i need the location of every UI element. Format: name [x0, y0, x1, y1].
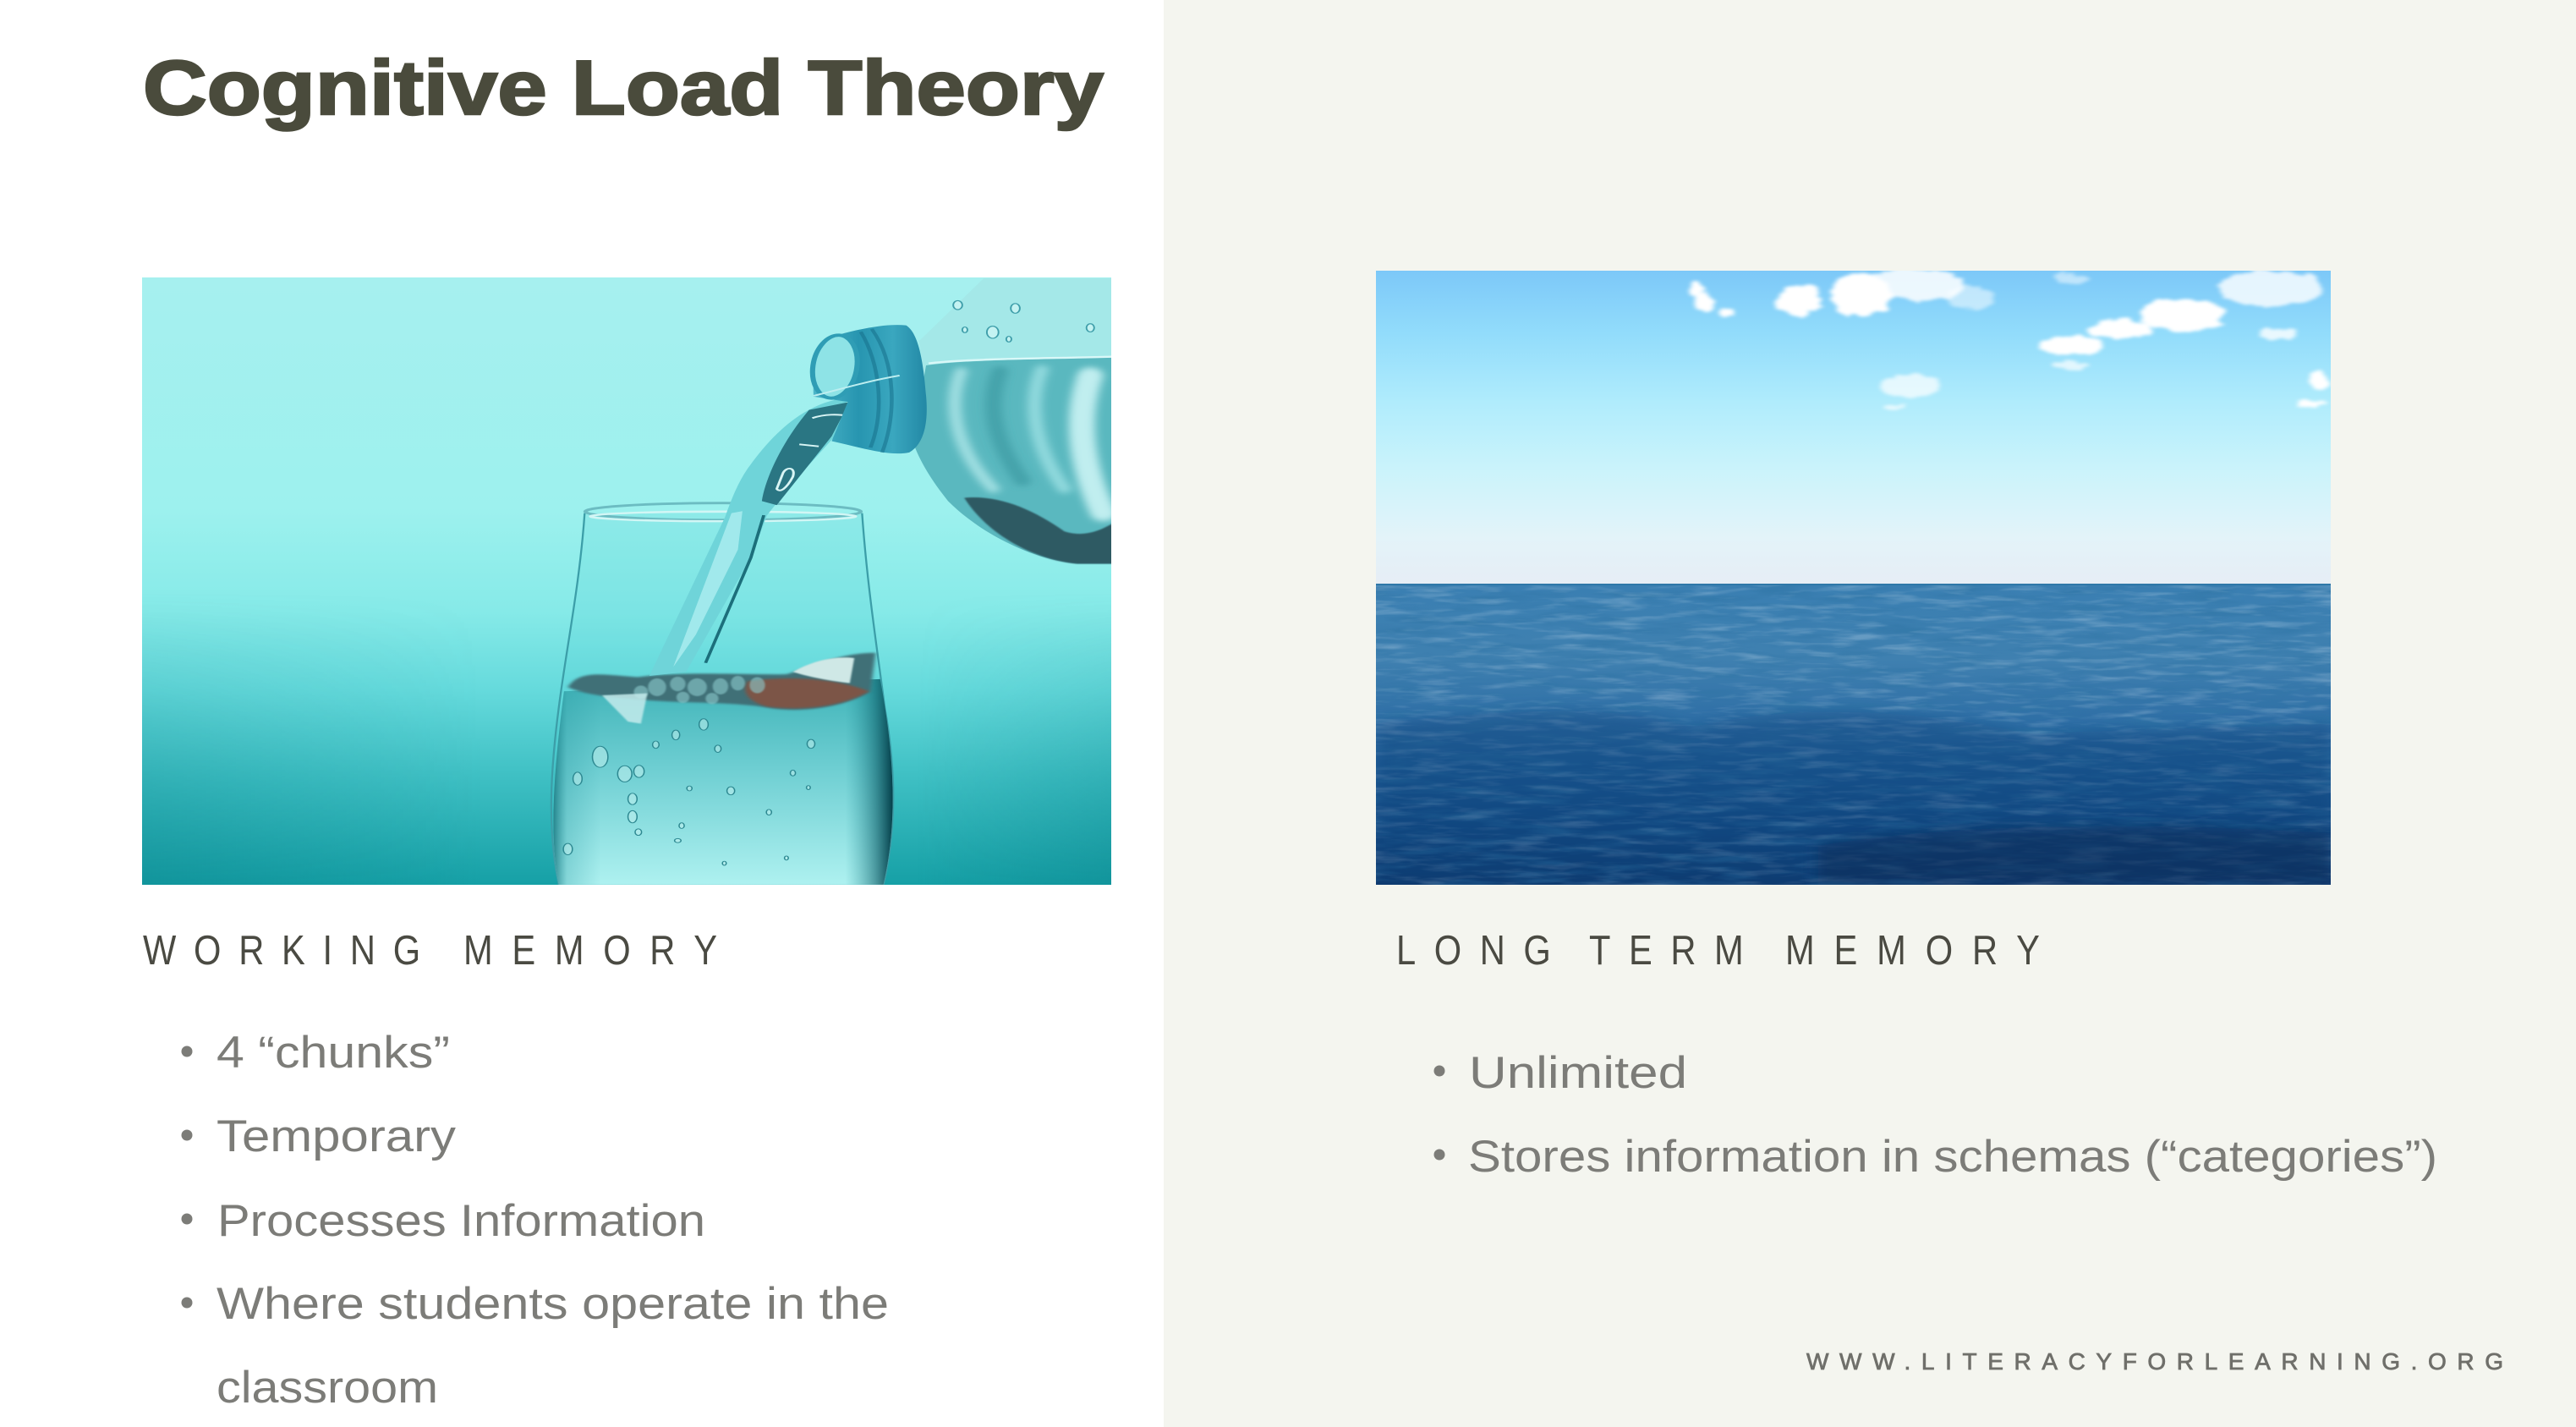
bottle	[808, 278, 1116, 563]
sky	[1376, 271, 2331, 585]
panel: long term memory background	[1164, 0, 2576, 1427]
bullet item: temporary: Temporary	[216, 1111, 457, 1161]
heading: long term memory: MEMORY	[1785, 927, 2040, 974]
clouds	[1690, 268, 2330, 411]
sea	[1376, 584, 2331, 885]
bullet item: where students operate: Where students operate in the	[216, 1279, 889, 1329]
heading: long term memory	[1396, 927, 2040, 974]
heading: long term memory: LONG	[1396, 927, 1551, 974]
photo: water poured into glass	[142, 277, 1116, 885]
bullet item: unlimited: Unlimited	[1469, 1048, 1687, 1098]
heading: working memory	[143, 927, 717, 974]
water in glass	[553, 653, 893, 885]
icon: drinking glass	[551, 503, 893, 885]
title: Cognitive Load Theory	[143, 46, 1104, 131]
list: working memory points	[181, 1028, 889, 1413]
list: long term memory points	[1434, 1048, 2437, 1182]
water stream	[649, 398, 850, 676]
footer: website: WWW.LITERACYFORLEARNING.ORG	[1806, 1348, 2503, 1375]
bullet item: stores information: Stores information in schemas (“categories”)	[1468, 1132, 2437, 1182]
heading: long term memory: TERM	[1589, 927, 1744, 974]
heading: working memory: WORKING	[143, 927, 420, 974]
panel: working memory background	[0, 0, 1164, 1427]
heading: working memory: MEMORY	[463, 927, 717, 974]
bullet item: where students operate: classroom	[216, 1363, 438, 1413]
bullet item: 4 chunks: 4 “chunks”	[216, 1028, 450, 1078]
bubbles	[563, 719, 815, 865]
photo: open sea and sky	[1376, 268, 2331, 885]
bullet item: where students operate	[181, 1279, 889, 1413]
bullet item: processes information: Processes Information	[217, 1196, 705, 1246]
